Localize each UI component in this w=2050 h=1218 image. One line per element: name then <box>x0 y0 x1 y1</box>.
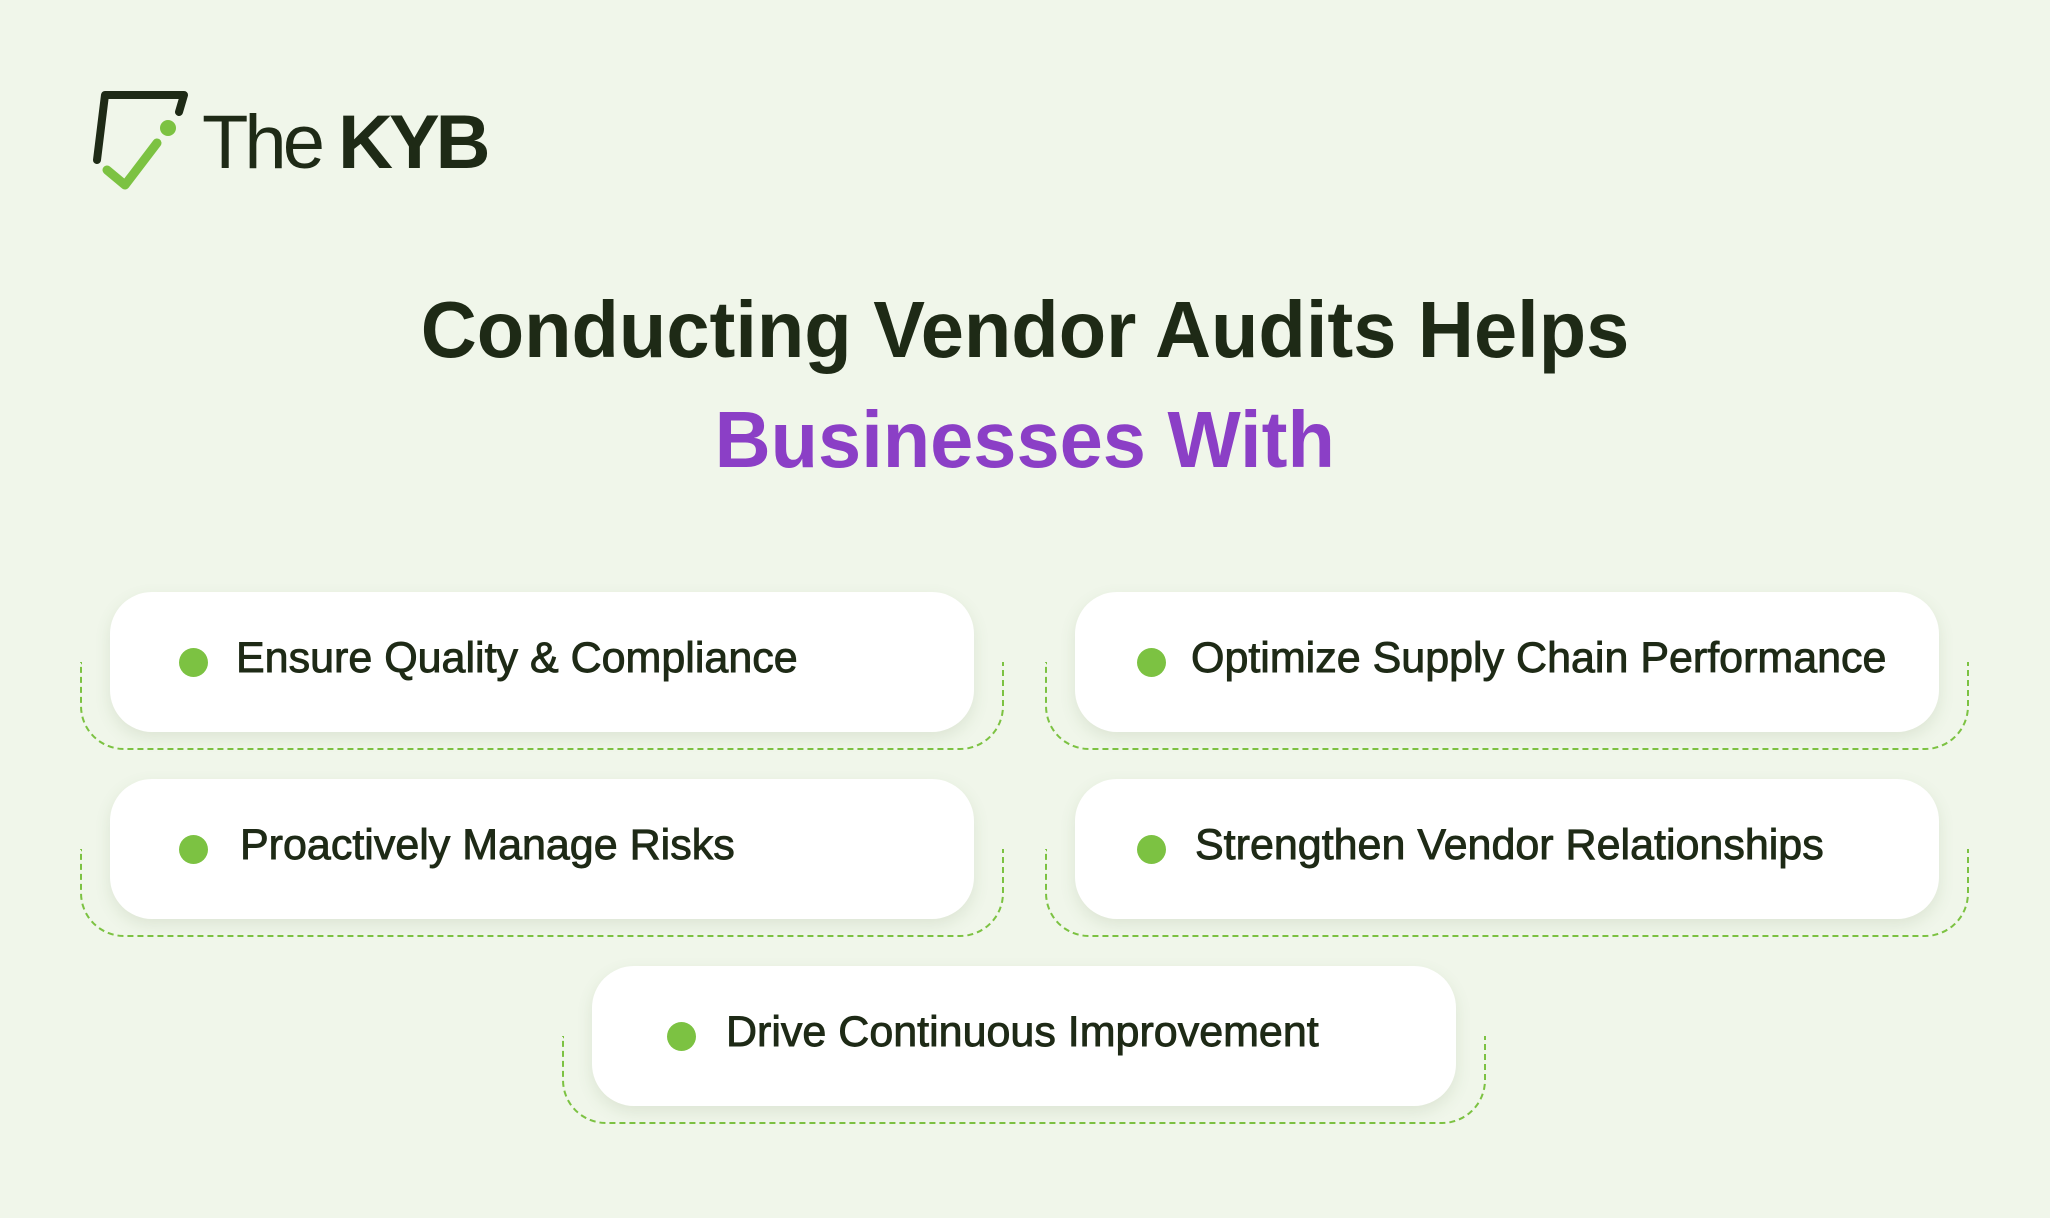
logo <box>93 91 488 190</box>
title: Conducting Vendor Audits Helps <box>421 285 1629 374</box>
panel: vendor relationships <box>1045 779 1969 937</box>
label: Proactively Manage Risks <box>240 821 735 869</box>
bullet <box>179 648 208 677</box>
bullet <box>179 835 208 864</box>
subtitle: Businesses With <box>715 395 1335 484</box>
label: Optimize Supply Chain Performance <box>1191 634 1886 682</box>
icon: shield check <box>93 91 188 190</box>
label: Strengthen Vendor Relationships <box>1195 821 1824 869</box>
label: Ensure Quality & Compliance <box>236 634 798 682</box>
panel: ensure quality <box>80 592 1004 750</box>
bullet <box>667 1022 696 1051</box>
panel: manage risks <box>80 779 1004 937</box>
logo text: The KYB <box>202 100 487 185</box>
bullet <box>1137 648 1166 677</box>
bullet <box>1137 835 1166 864</box>
label: Drive Continuous Improvement <box>726 1008 1319 1056</box>
panel: optimize supply chain <box>1045 592 1969 750</box>
panel: continuous improvement <box>562 966 1486 1124</box>
